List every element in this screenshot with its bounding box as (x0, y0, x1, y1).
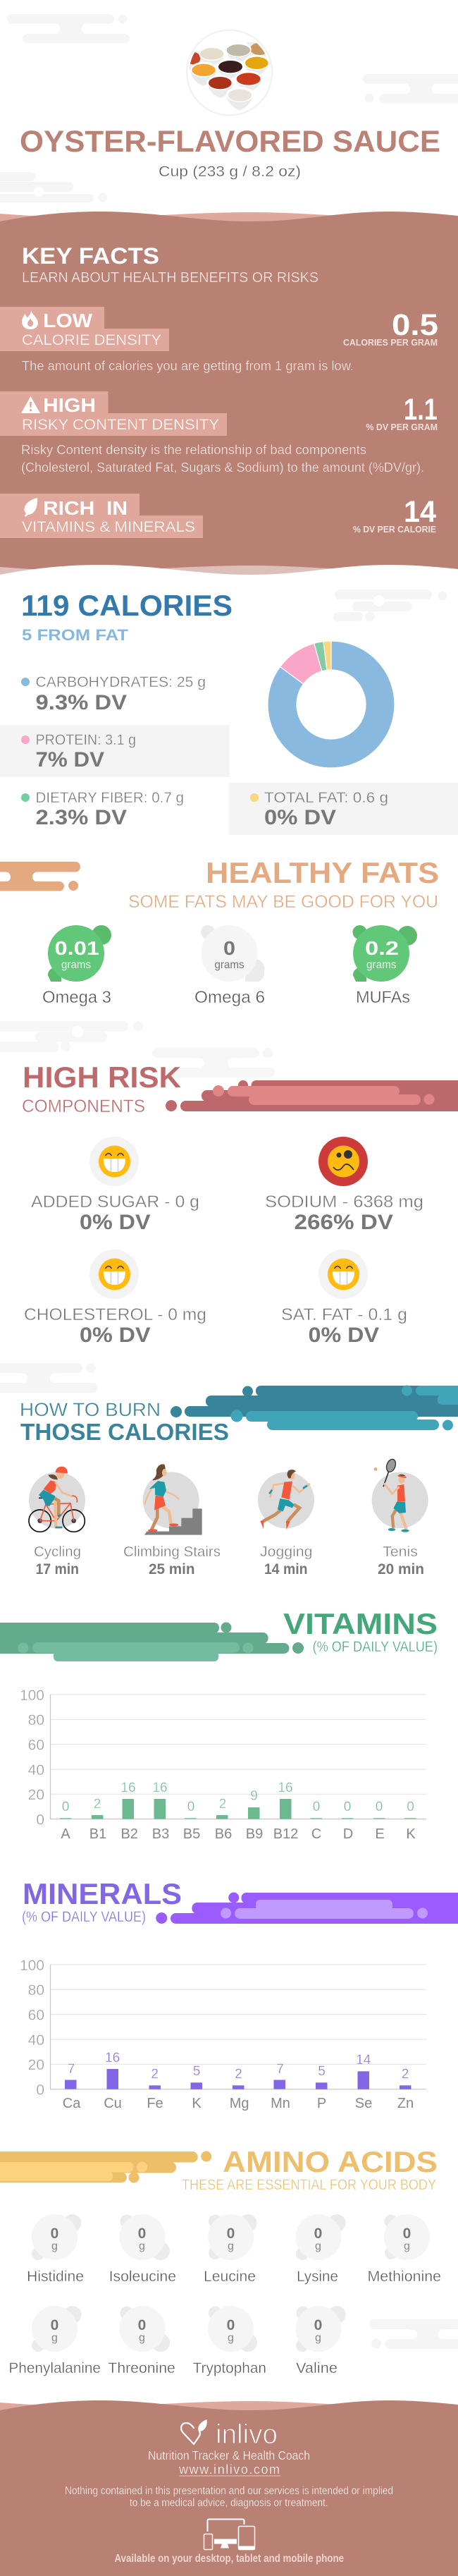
donut chart (268, 641, 395, 768)
vitamins and minerals block: % DV PER CALORIE (353, 524, 436, 535)
amino: threonine (108, 2306, 175, 2376)
bar chart: vitamins: 60 (28, 1738, 44, 1753)
tennis label: Tenis (383, 1544, 418, 1560)
bar chart: vitamins: 0 (36, 1812, 44, 1828)
legend: carbohydrates (21, 674, 206, 714)
legend: dietary fiber: DIETARY FIBER: 0.7 g (35, 790, 184, 806)
vitamins and minerals block: VITAMINS & MINERALS (22, 519, 195, 535)
omega 6 badge: Omega 6 (194, 988, 265, 1007)
amino: tryptophan: g (228, 2332, 234, 2344)
bar chart: minerals: 100 (20, 1958, 44, 1974)
risky content density block: (Cholesterol, Saturated Fat, Sugars & Sodium) to the amount (%DV/gr). (21, 460, 424, 475)
background cloud near amino acids (369, 2319, 458, 2349)
omega 3 badge: 0.01 (55, 937, 99, 959)
risky content density block (0, 391, 438, 475)
bar chart: vitamins: B5 (183, 1826, 200, 1842)
icon: climbing stairs (143, 1464, 202, 1535)
food image: bowls of sauce (186, 30, 272, 116)
tagline: Nutrition Tracker & Health Coach (148, 2448, 310, 2462)
panel: high risk (22, 1061, 458, 1347)
jogging label: 14 min (264, 1561, 307, 1577)
bar chart: vitamins: B12 (273, 1826, 298, 1842)
omega 3 badge: Omega 3 (42, 988, 111, 1007)
bar chart: vitamins: B6 (215, 1826, 232, 1842)
bar chart: vitamins: 0 (407, 1800, 414, 1814)
cholesterol item: CHOLESTEROL - 0 mg (24, 1305, 206, 1324)
bar chart: minerals: Fe (147, 2096, 163, 2111)
bar chart: minerals: Se (355, 2096, 372, 2111)
panel: amino acids (0, 2145, 441, 2376)
vitamins subheading: (% OF DAILY VALUE) (313, 1639, 438, 1655)
healthy fats heading: HEALTHY FATS (206, 856, 439, 889)
burn heading bold: THOSE CALORIES (20, 1419, 229, 1445)
omega 3 badge (42, 925, 111, 1007)
omega 6 badge: grams (214, 959, 244, 971)
amino: methionine (368, 2214, 441, 2285)
added sugar item: ADDED SUGAR - 0 g (31, 1192, 199, 1211)
icon: leaf (25, 498, 37, 517)
minerals heading: MINERALS (23, 1877, 182, 1910)
bar chart: minerals: 2 (235, 2067, 242, 2082)
jogging label (260, 1544, 313, 1577)
bar chart: minerals: 7 (68, 2062, 75, 2077)
bar chart: vitamins: 16 (120, 1781, 136, 1795)
bar chart: minerals: 60 (28, 2007, 44, 2024)
legend: carbohydrates: CARBOHYDRATES: 25 g (35, 674, 206, 690)
amino: methionine: g (404, 2240, 410, 2252)
omega 6 badge: 0 (223, 937, 235, 959)
risky content density block: Risky Content density is the relationship of bad components (21, 443, 366, 457)
bar chart: vitamins: 0 (62, 1800, 69, 1814)
bar chart: vitamins: 80 (28, 1712, 44, 1728)
legend: protein: PROTEIN: 3.1 g (35, 732, 136, 748)
amino: leucine (204, 2214, 256, 2285)
inlivo wordmark: inlivo (216, 2419, 278, 2450)
bar chart: minerals: 40 (28, 2032, 44, 2049)
calorie density block: CALORIES PER GRAM (343, 337, 438, 348)
healthy fats banner shape (0, 862, 80, 891)
bar chart: vitamins: 0 (187, 1800, 194, 1814)
tennis label (378, 1544, 424, 1577)
bar chart: vitamins: B3 (152, 1826, 169, 1842)
legend: dietary fiber: 2.3% DV (35, 806, 127, 829)
mufas badge: grams (366, 959, 396, 971)
saturated fat item (281, 1250, 407, 1347)
bar chart: vitamins: 0 (313, 1800, 320, 1814)
bar chart: minerals: 7 (276, 2062, 284, 2077)
amino: phenylalanine: Phenylalanine (8, 2360, 101, 2376)
calories from fat: 5 FROM FAT (22, 626, 129, 644)
amino acids banner shape (0, 2151, 211, 2183)
bar chart: minerals: Mg (230, 2096, 249, 2111)
background cloud near calories (333, 590, 447, 621)
jogging label: Jogging (260, 1544, 313, 1560)
amino: phenylalanine: 0 (51, 2317, 58, 2333)
legend: protein (0, 725, 230, 777)
bar chart: vitamins: 2 (219, 1797, 226, 1812)
background cloud above burn section (0, 1363, 98, 1393)
amino: histidine (27, 2214, 84, 2285)
disclaimer (65, 2485, 393, 2509)
panel: healthy fats (0, 856, 439, 1007)
amino: threonine: g (139, 2332, 145, 2344)
amino: valine: g (315, 2332, 321, 2344)
key facts heading: KEY FACTS (22, 243, 159, 269)
calorie density block: CALORIE DENSITY (22, 332, 161, 348)
bar chart: vitamins: 2 (94, 1797, 101, 1812)
mufas badge (352, 925, 417, 1007)
bar chart: vitamins: 40 (28, 1762, 44, 1778)
bar chart: vitamins: B1 (89, 1826, 106, 1842)
key facts background with waves (0, 212, 458, 585)
vitamins and minerals block: RICH IN (43, 497, 128, 519)
sodium item: SODIUM - 6368 mg (265, 1192, 423, 1211)
amino: lysine (296, 2214, 345, 2285)
climbing stairs label: 25 min (149, 1561, 194, 1577)
amino: histidine: 0 (51, 2226, 58, 2242)
risky content density block: % DV PER GRAM (366, 422, 438, 432)
risky content density block: 1.1 (404, 393, 438, 427)
bar chart: minerals: Cu (104, 2096, 122, 2111)
amino: isoleucine: g (139, 2240, 145, 2252)
bar chart: minerals: 2 (402, 2067, 409, 2082)
omega 6 badge (194, 925, 265, 1007)
risky content density block: HIGH (43, 394, 96, 416)
website link: www.inlivo.com (178, 2462, 280, 2477)
vitamins and minerals block (0, 494, 436, 538)
legend: protein: 7% DV (35, 748, 104, 771)
amino: threonine: 0 (138, 2317, 146, 2333)
mufas badge: 0.2 (365, 937, 399, 959)
high risk banner shape (166, 1080, 458, 1111)
disclaimer: to be a medical advice, diagnosis or treatment. (130, 2497, 328, 2509)
bar chart: minerals: K (192, 2096, 202, 2111)
high risk heading: HIGH RISK (23, 1061, 181, 1094)
panel: calories (0, 589, 458, 835)
amino: tryptophan (193, 2306, 266, 2376)
calorie density block: The amount of calories you are getting from 1 gram is low. (22, 359, 354, 373)
amino: lysine: 0 (314, 2226, 322, 2242)
climbing stairs label: Climbing Stairs (123, 1544, 221, 1560)
bar chart: vitamins: 16 (278, 1781, 293, 1795)
panel: footer (0, 2400, 458, 2576)
amino: isoleucine (109, 2214, 176, 2285)
bar chart: minerals: 16 (105, 2051, 120, 2065)
bar chart: minerals: Mn (271, 2096, 290, 2111)
bar chart: vitamins: 20 (28, 1787, 44, 1803)
bar chart: minerals: Zn (397, 2096, 414, 2111)
disclaimer: Nothing contained in this presentation and our services is intended or implied (65, 2485, 393, 2497)
bar chart: vitamins: B2 (120, 1826, 138, 1842)
amino: leucine: g (228, 2240, 234, 2252)
minerals subheading: (% OF DAILY VALUE) (22, 1909, 146, 1925)
background clouds above high risk (0, 1021, 275, 1078)
amino: isoleucine: Isoleucine (109, 2269, 176, 2285)
panel: how to burn those calories (20, 1385, 458, 1577)
bar chart: minerals: Ca (63, 2096, 81, 2111)
bar chart: vitamins: C (311, 1826, 321, 1842)
burn banner shape (171, 1385, 458, 1430)
risky content density block: RISKY CONTENT DENSITY (22, 417, 219, 433)
saturated fat item: 0% DV (309, 1324, 379, 1347)
cycling label: Cycling (34, 1544, 81, 1560)
cycling label (34, 1544, 81, 1577)
legend: dietary fiber (21, 790, 184, 829)
amino acids heading: AMINO ACIDS (223, 2145, 438, 2178)
amino: leucine: 0 (227, 2226, 235, 2242)
amino: histidine: Histidine (27, 2269, 84, 2285)
icon: tennis (372, 1458, 428, 1532)
tennis label: 20 min (378, 1561, 424, 1577)
omega 3 badge: grams (61, 959, 91, 971)
amino: leucine: Leucine (204, 2269, 256, 2285)
amino: valine: Valine (296, 2360, 338, 2376)
amino: phenylalanine (8, 2306, 101, 2376)
panel: minerals (20, 1877, 458, 2111)
amino: tryptophan: Tryptophan (193, 2360, 266, 2376)
icon: flame (22, 310, 38, 329)
bar chart: minerals: P (317, 2096, 326, 2111)
bar chart: minerals: 5 (318, 2064, 326, 2079)
icon: jogging (258, 1470, 314, 1530)
bar chart: minerals: 0 (36, 2082, 44, 2099)
icon: warning triangle (21, 396, 40, 413)
amino: valine (296, 2306, 345, 2376)
bar chart: minerals: 5 (193, 2064, 200, 2079)
vitamins heading: VITAMINS (283, 1607, 438, 1640)
amino: methionine: Methionine (368, 2269, 441, 2285)
amino: threonine: Threonine (108, 2360, 175, 2376)
bar chart: vitamins (20, 1687, 426, 1842)
bar chart: vitamins: 0 (344, 1800, 351, 1814)
bar chart: vitamins: K (406, 1826, 416, 1842)
bar chart: vitamins: 0 (376, 1800, 383, 1814)
background clouds: right (363, 74, 458, 103)
amino: methionine: 0 (403, 2226, 411, 2242)
sodium item (265, 1137, 423, 1234)
cholesterol item (24, 1250, 206, 1347)
bar chart: minerals: 2 (151, 2067, 159, 2082)
legend: total fat (229, 783, 458, 835)
icon: inlivo heart logo (181, 2419, 207, 2444)
cycling label: 17 min (35, 1561, 79, 1577)
key facts subheading: LEARN ABOUT HEALTH BENEFITS OR RISKS (22, 270, 318, 286)
serving size: Cup (233 g / 8.2 oz) (159, 164, 301, 180)
amino: valine: 0 (314, 2317, 322, 2333)
panel: key facts (0, 212, 458, 585)
calorie density block (0, 307, 438, 373)
footer background with waves (0, 2400, 458, 2576)
amino: lysine: Lysine (297, 2269, 338, 2285)
panel: vitamins (0, 1607, 438, 1842)
bar chart: vitamins: D (343, 1826, 353, 1842)
calorie density block: LOW (43, 310, 93, 331)
title: OYSTER-FLAVORED SAUCE (20, 125, 440, 159)
mufas badge: MUFAs (356, 988, 410, 1007)
high risk subheading: COMPONENTS (22, 1097, 145, 1116)
bar chart: minerals: 14 (356, 2053, 371, 2068)
bar chart: minerals (20, 1958, 426, 2111)
bar chart: vitamins: E (375, 1826, 385, 1842)
sodium item: 266% DV (295, 1211, 393, 1234)
bar chart: vitamins: 100 (20, 1687, 44, 1704)
amino: histidine: g (51, 2240, 58, 2252)
bar chart: vitamins: A (61, 1826, 70, 1842)
cholesterol item: 0% DV (80, 1324, 151, 1347)
added sugar item (31, 1137, 199, 1234)
calories heading: 119 CALORIES (21, 589, 233, 622)
amino: tryptophan: 0 (227, 2317, 235, 2333)
vitamins and minerals block: 14 (404, 495, 436, 529)
availability note: Available on your desktop, tablet and mobile phone (114, 2553, 344, 2565)
legend: carbohydrates: 9.3% DV (35, 691, 127, 714)
legend: total fat: TOTAL FAT: 0.6 g (264, 790, 388, 806)
icon: devices (204, 2519, 255, 2550)
bar chart: vitamins: 9 (250, 1788, 258, 1804)
minerals banner shape (156, 1893, 458, 1924)
background clouds: top left (7, 14, 130, 44)
icon: cycling (29, 1467, 85, 1532)
calorie density block: 0.5 (392, 308, 438, 342)
background clouds: left middle (0, 172, 107, 202)
bar chart: minerals: 20 (28, 2057, 44, 2073)
bar chart: minerals: 80 (28, 1982, 44, 1998)
amino: lysine: g (315, 2240, 321, 2252)
burn heading light: HOW TO BURN (20, 1399, 161, 1420)
added sugar item: 0% DV (80, 1211, 151, 1234)
saturated fat item: SAT. FAT - 0.1 g (281, 1305, 407, 1324)
amino: isoleucine: 0 (138, 2226, 146, 2242)
vitamins banner shape (0, 1622, 304, 1661)
climbing stairs label (123, 1544, 221, 1577)
amino: phenylalanine: g (51, 2332, 58, 2344)
bar chart: vitamins: B9 (246, 1826, 263, 1842)
healthy fats subheading: SOME FATS MAY BE GOOD FOR YOU (128, 892, 438, 912)
legend: total fat: 0% DV (264, 806, 336, 829)
bar chart: vitamins: 16 (152, 1781, 168, 1795)
